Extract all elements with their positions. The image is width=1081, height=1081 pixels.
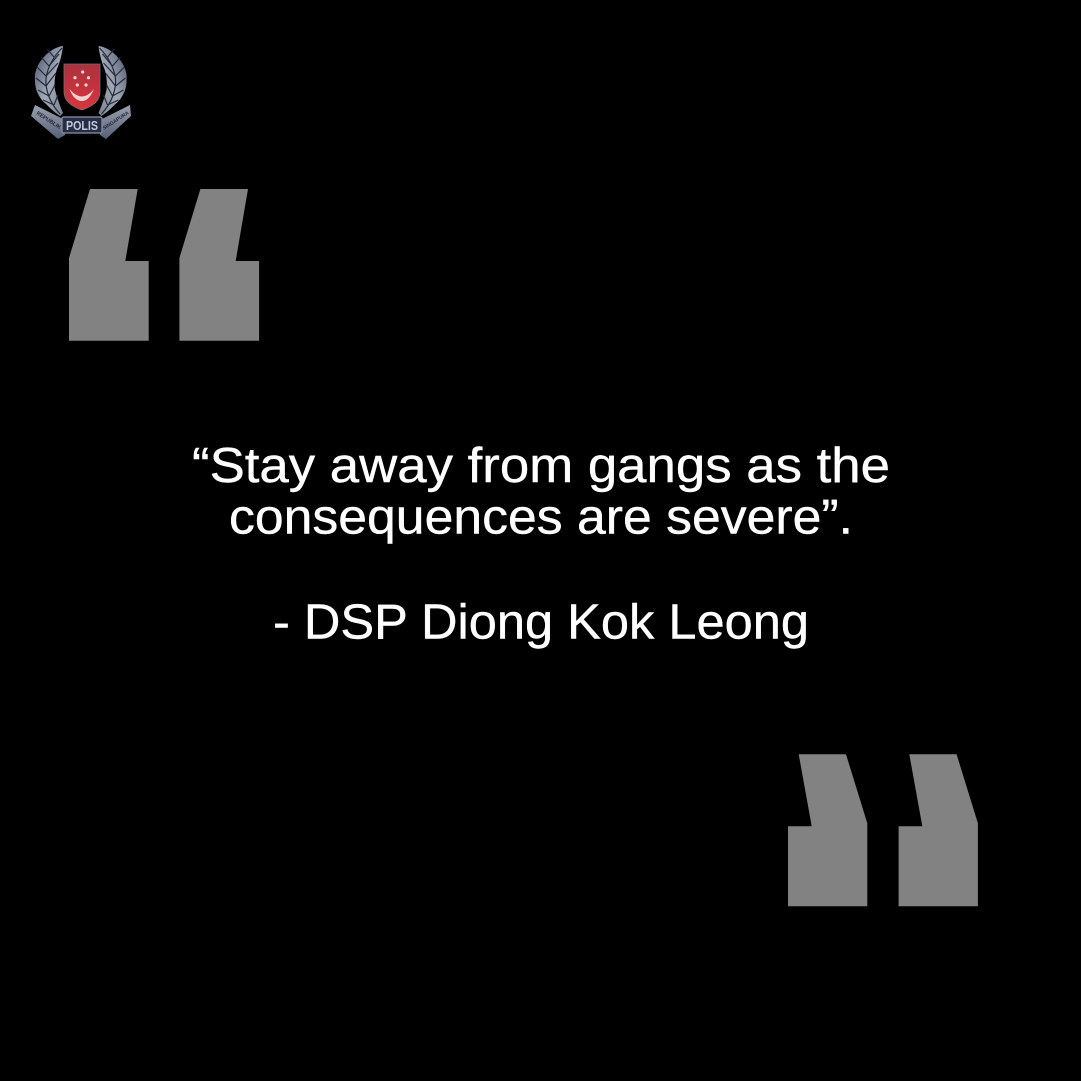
right wreath [98,46,127,116]
POLIS plate: POLIS [66,118,98,133]
icon: police crest logo [31,46,131,139]
quote text: “Stay away from gangs as the [192,438,890,493]
right ribbon: SINGAPURA: SINGAPURA [102,110,131,132]
icon: closing quotation mark [788,754,978,906]
left ribbon: REPUBLIK: REPUBLIK [35,111,62,131]
quote text: consequences are severe”. [229,490,853,544]
icon: opening quotation mark [69,189,259,341]
crescent and stars [70,70,94,101]
quote text [192,438,890,650]
red shield [64,64,100,110]
attribution: - DSP Diong Kok Leong [273,594,809,650]
left wreath [35,46,63,116]
